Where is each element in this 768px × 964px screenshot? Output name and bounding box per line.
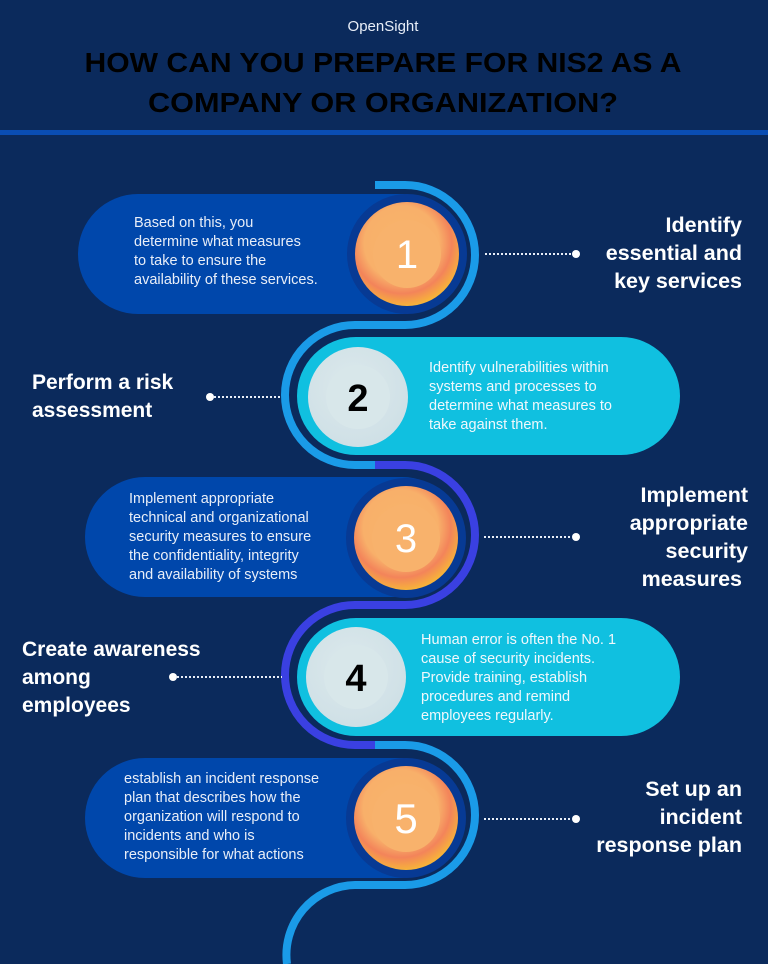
step 5: plan that describes how the [124,790,301,806]
title: HOW CAN YOU PREPARE FOR NIS2 AS A [84,47,682,78]
step 4: procedures and remind [421,689,570,705]
step 3: technical and organizational [129,510,309,526]
step 5 [85,758,742,878]
winding path [285,185,475,964]
step 3: measures [642,567,742,591]
header: COMPANY OR ORGANIZATION? [148,87,618,118]
step 4: 4 [345,658,367,700]
step 2: Perform a risk [32,371,174,394]
step 5: 5 [394,795,418,842]
step 3: Implement [640,483,748,507]
step 5: establish an incident response [124,771,319,787]
step 4: employees regularly. [421,708,554,724]
step 3: and availability of systems [129,567,297,583]
step 3 [85,477,748,598]
step 3: the confidentiality, integrity [129,548,300,564]
step 4: Create awareness [22,638,201,661]
step 1 [78,194,742,314]
step 2: assessment [32,399,152,422]
step 3: Implement appropriate [129,491,274,507]
step 5: incidents and who is [124,828,255,844]
step 1: 1 [396,233,418,277]
step 4: among [22,666,91,689]
step 5: response plan [596,833,742,857]
step 4: Human error is often the No. 1 [421,632,616,648]
step 1: Based on this, you [134,215,253,231]
brand name: OpenSight [348,18,419,35]
step 5: responsible for what actions [124,847,304,863]
step 4: Provide training, establish [421,670,587,686]
step 2 [32,337,680,455]
header [84,18,682,118]
step 4: cause of security incidents. [421,651,595,667]
step 2: 2 [347,378,369,420]
step 2: take against them. [429,417,548,433]
step 1: to take to ensure the [134,253,266,269]
step 4 [22,618,680,736]
step 3: 3 [395,517,417,561]
step 1: Identify [666,213,742,237]
step 1: availability of these services. [134,272,318,288]
step 1: essential and [606,241,742,265]
step 3: security measures to ensure [129,529,311,545]
step 5: Set up an [645,777,742,801]
step 5: organization will respond to [124,809,300,825]
step 1: key services [614,269,742,293]
step 3: security [666,539,748,563]
step 5: incident [660,805,742,829]
step 3: appropriate [630,511,748,535]
step 1: determine what measures [134,234,301,250]
step 4: employees [22,694,131,717]
step 2: determine what measures to [429,398,612,414]
step 2: Identify vulnerabilities within [429,360,609,376]
step 2: systems and processes to [429,379,597,395]
